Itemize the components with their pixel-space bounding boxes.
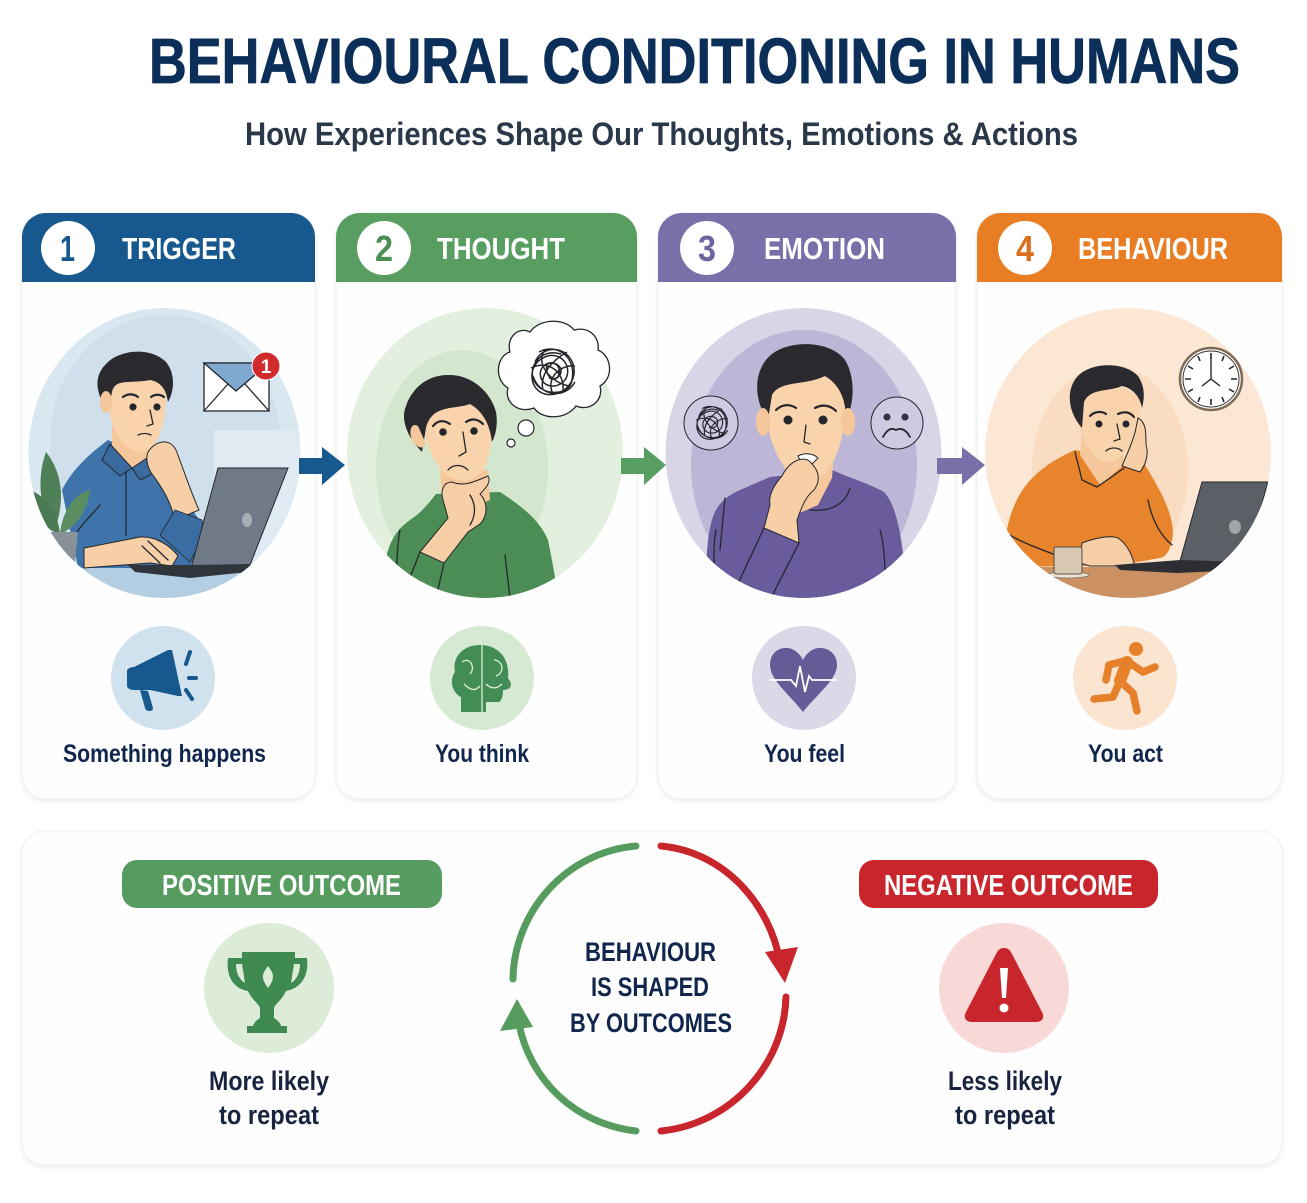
icon: megaphone bbox=[111, 626, 215, 730]
illustration: man at laptop receiving an email bbox=[20, 308, 310, 605]
man bbox=[706, 344, 908, 600]
arrowhead: green bbox=[500, 999, 533, 1031]
mug bbox=[1047, 547, 1089, 578]
header: thought: 2 bbox=[375, 228, 393, 269]
header: trigger bbox=[22, 213, 315, 282]
arc: red bottom bbox=[661, 997, 786, 1131]
icon: envelope with notification bbox=[204, 352, 280, 411]
text: less likely to repeat bbox=[948, 1066, 1062, 1130]
illustration: anxious man bbox=[666, 308, 942, 600]
header: behaviour bbox=[977, 213, 1282, 282]
icon: warning triangle bbox=[939, 923, 1069, 1053]
laptop bbox=[128, 468, 288, 578]
icon: brain in head bbox=[430, 626, 534, 730]
pill: positive outcome bbox=[122, 860, 442, 908]
header: trigger: TRIGGER bbox=[122, 231, 236, 266]
icon: scribble bubble bbox=[684, 396, 738, 450]
cycle diagram bbox=[500, 846, 798, 1131]
man bbox=[384, 375, 558, 600]
header: emotion: EMOTION bbox=[764, 231, 885, 266]
text: less likely to repeat: Less likely bbox=[948, 1066, 1062, 1096]
panel: outcomes bbox=[22, 831, 1282, 1165]
illustration: tired man at laptop bbox=[980, 308, 1280, 607]
text: less likely to repeat: to repeat bbox=[955, 1100, 1055, 1130]
text: behaviour is shaped by outcomes: BY OUTCOMES bbox=[570, 1008, 732, 1038]
pill: negative outcome: NEGATIVE OUTCOME bbox=[884, 870, 1133, 902]
icon: sad face bubble bbox=[871, 397, 923, 449]
icon: heart with pulse bbox=[752, 626, 856, 730]
text: behaviour is shaped by outcomes: IS SHAPED bbox=[591, 972, 709, 1002]
header: trigger: 1 bbox=[60, 228, 75, 269]
label: you feel: You feel bbox=[764, 740, 845, 768]
positive outcome bbox=[122, 860, 442, 1130]
text: behaviour is shaped by outcomes: BEHAVIOUR bbox=[585, 937, 716, 967]
header: thought: THOUGHT bbox=[437, 231, 565, 266]
arc: green top bbox=[513, 846, 636, 979]
arc: green bottom bbox=[519, 1024, 636, 1131]
arrow: emotion to behaviour bbox=[937, 447, 985, 485]
header: emotion bbox=[658, 213, 956, 282]
laptop bbox=[1115, 482, 1268, 573]
arrowhead: red bbox=[765, 947, 798, 983]
pill: negative outcome bbox=[859, 860, 1158, 908]
text: more likely to repeat: to repeat bbox=[219, 1100, 319, 1130]
text: more likely to repeat: More likely bbox=[209, 1066, 329, 1096]
header: behaviour: BEHAVIOUR bbox=[1078, 231, 1228, 266]
icon: wall clock bbox=[1180, 348, 1242, 410]
icon: envelope with notification: 1 bbox=[261, 357, 272, 378]
arc: red top bbox=[661, 846, 780, 962]
text: behaviour is shaped by outcomes bbox=[570, 937, 732, 1038]
arrow: trigger to thought bbox=[299, 447, 345, 485]
plant bbox=[33, 452, 90, 562]
label: you think: You think bbox=[435, 740, 529, 768]
panel: step 2 thought bbox=[336, 213, 637, 799]
icon: trophy bbox=[204, 923, 334, 1053]
label: something happens: Something happens bbox=[63, 740, 266, 768]
icon: running figure bbox=[1073, 626, 1177, 730]
panel: step 4 behaviour bbox=[977, 213, 1282, 799]
man bbox=[62, 352, 205, 568]
header: thought bbox=[336, 213, 637, 282]
text: more likely to repeat bbox=[209, 1066, 329, 1130]
subtitle: How Experiences Shape Our Thoughts, Emotions & Actions bbox=[245, 116, 1078, 152]
label: you act: You act bbox=[1088, 740, 1164, 768]
panel: step 1 trigger bbox=[20, 213, 315, 799]
pill: positive outcome: POSITIVE OUTCOME bbox=[162, 870, 401, 902]
header: emotion: 3 bbox=[698, 228, 716, 269]
header: behaviour: 4 bbox=[1016, 228, 1034, 269]
icon: thought bubble with scribble bbox=[498, 321, 610, 447]
panel: step 3 emotion bbox=[658, 213, 956, 799]
man bbox=[1005, 365, 1173, 567]
negative outcome bbox=[859, 860, 1158, 1130]
arrow: thought to emotion bbox=[621, 447, 666, 485]
illustration: thinking man bbox=[347, 308, 623, 600]
